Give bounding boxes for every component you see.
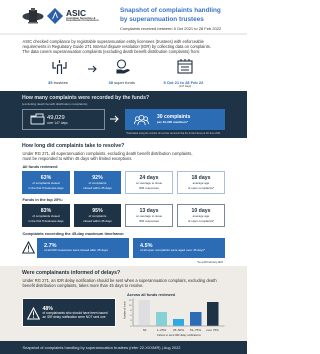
caption: of open complaints* [188,219,214,223]
value: 48% [42,306,53,312]
caption: in the first 5 business days [28,186,64,190]
icon: people [134,115,149,126]
body text: Under RG 271, an IDR delay notification should be sent when a superannuation complaint, excluding death [22,278,217,282]
caption: of complaints [89,181,106,185]
resolve text [22,150,192,161]
body text [22,278,217,288]
icon: calendar [177,59,193,74]
caption [188,181,214,190]
stat: 92% [74,171,121,194]
caption: over 147 days [47,120,68,124]
caption [83,181,112,190]
panel: how many complaints [0,91,247,138]
title: Snapshot of complaints handling [120,7,221,14]
bar chart [124,292,224,337]
caption: average age [193,214,209,218]
value: 92% [92,175,103,181]
ASIC tagline: Investments Commission [66,19,99,22]
stat: period [164,59,204,88]
value: 63% [41,175,51,181]
title: by superannuation trustees [120,16,204,22]
y axis labels: 12 [129,300,132,302]
y axis labels: 10 [129,305,132,307]
panel: informed of delays [0,266,247,341]
value: 18 days [191,175,211,181]
value: 24 days [139,175,159,181]
bars [138,300,218,326]
axes [133,298,224,326]
caption [28,214,64,223]
heading: Were complainants informed of delays? [22,270,120,276]
label: 38 super funds: 38 super funds [108,80,135,84]
y axis labels: 6 [130,315,132,317]
ASIC tagline [66,16,99,22]
caption [42,311,108,319]
caption: on average to issue [136,214,162,218]
icon: warning [22,241,35,254]
arrow [110,116,119,122]
caption: in the first 5 business days [28,219,64,223]
caption: of complainants who should have been issued [42,311,108,315]
footer [0,341,247,354]
y axis labels: 8 [130,310,132,312]
label: 35 trustees: 35 trustees [48,80,68,84]
x axis labels: over 75% [206,328,219,332]
caption: IDR responses [139,186,159,190]
caption: IDR responses [139,219,159,223]
label: days: (147 days) [179,84,191,88]
header logos [22,8,99,24]
label: dates: 5 Oct 21 to 28 Feb 22 [164,80,203,84]
footnote: *As at 28 February 2022 [197,261,223,264]
heading: how long: How long did complaints take to resolve? [22,143,124,149]
caption: of complaints closed [32,214,60,218]
stat: 4.5% [133,238,225,258]
body text: benefit distribution complaints, takes more than 45 days to resolve. [22,283,144,288]
stat: 24 days [125,171,173,194]
caption: of all IDR responses were issued after 45 days [44,248,108,252]
stat: 63% [22,171,70,194]
icon: ASIC diamond [47,8,63,24]
stat: 2.7% [37,238,129,258]
stat: 95% [74,204,121,227]
intro text: The data covers superannuation complaints (excluding death benefit distribution complaints) from: [22,49,200,54]
box: complaints per members [125,109,225,130]
heading: How many complaints were recorded by the funds? [22,95,149,101]
caption: of complaints closed [32,181,60,185]
stat: 13 days [125,204,173,227]
stat: trustees [48,60,68,84]
label: exceeding timeframe: Complaints exceeding the 45-day maximum timeframe: [22,231,124,236]
caption [83,214,112,223]
x axis labels: 1–25% [157,328,167,332]
y axis title: Number of funds [124,301,126,319]
icon: warning [27,307,40,320]
caption: average age [193,181,209,185]
x axis title: Failure to send IDR delay notifications [157,333,202,337]
x axis labels: 51–75% [190,328,201,332]
title [120,7,221,22]
ASIC tagline: Australian Securities & [66,16,95,20]
caption [136,181,162,190]
arrow [88,66,97,72]
caption: an IDR delay notification were NOT sent one [42,315,106,319]
icon: super funds [116,60,130,74]
label: top 25%: Funds in the top 25%: [22,196,63,202]
caption: per 10,000 members* [157,120,188,124]
value: 30 complaints [157,114,190,120]
callout: 48% [22,298,116,327]
stat: super funds [108,60,135,85]
value: 13 days [139,208,159,214]
label: all funds: All funds reviewed: [22,164,58,169]
resolve text: Under RG 271, all superannuation complaints, excluding death benefit distribution complaints, [22,150,192,156]
value: 4.5% [140,242,153,248]
icon: trustees [52,60,67,74]
resolve text: must be responded to within 45 days with limited exceptions. [22,156,132,161]
footnote: *Calculated using the number of member accounts that the funds had as at 30 June 2021 [126,132,220,134]
x axis labels: 26–50% [173,328,184,332]
stat: 83% [22,204,70,227]
intro text: ASIC checked compliance by registrable superannuation entity licensees (trustees) with enforceable [22,38,204,44]
stat: 18 days [177,171,225,194]
value: 10 days [191,208,211,214]
subheading: (excluding death benefit distribution complaints) [22,102,87,106]
caption [136,214,162,223]
icon: folder [30,114,44,124]
y axis labels [129,300,132,328]
caption [28,181,64,190]
stat: 10 days [177,204,225,227]
footer text: Snapshot of complaints handling by superannuation trustees (refer 22-XXXMR) | Aug 2022 [22,344,180,350]
x axis labels: Nil [143,328,147,332]
caption: on average to issue [136,181,162,185]
icon: coat of arms [22,8,44,24]
value: 49,029 [47,114,65,120]
y axis labels: 0 [130,326,132,328]
caption: of open complaints* [188,186,214,190]
y axis labels: 4 [130,320,132,322]
intro text [22,38,211,54]
value: 95% [92,208,103,214]
x axis labels [143,328,219,332]
chart title: Across all funds reviewed [127,292,175,296]
caption [188,214,214,223]
intro text: requirements in Regulatory Guide 271 Internal dispute resolution (IDR) by collecting data on complaints. [22,44,211,49]
subtitle: Complaints received between 5 Oct 2021 to 28 Feb 2022 [120,26,221,31]
caption: closed within 45 days [83,186,112,190]
caption: of complaints [89,214,106,218]
value: 83% [41,208,51,214]
ASIC wordmark: ASIC [66,8,86,18]
caption: closed within 45 days [83,219,112,223]
value: 2.7% [44,242,57,248]
caption: of all open complaints were aged over 45 days* [140,248,205,252]
box: total complaints [22,109,105,130]
